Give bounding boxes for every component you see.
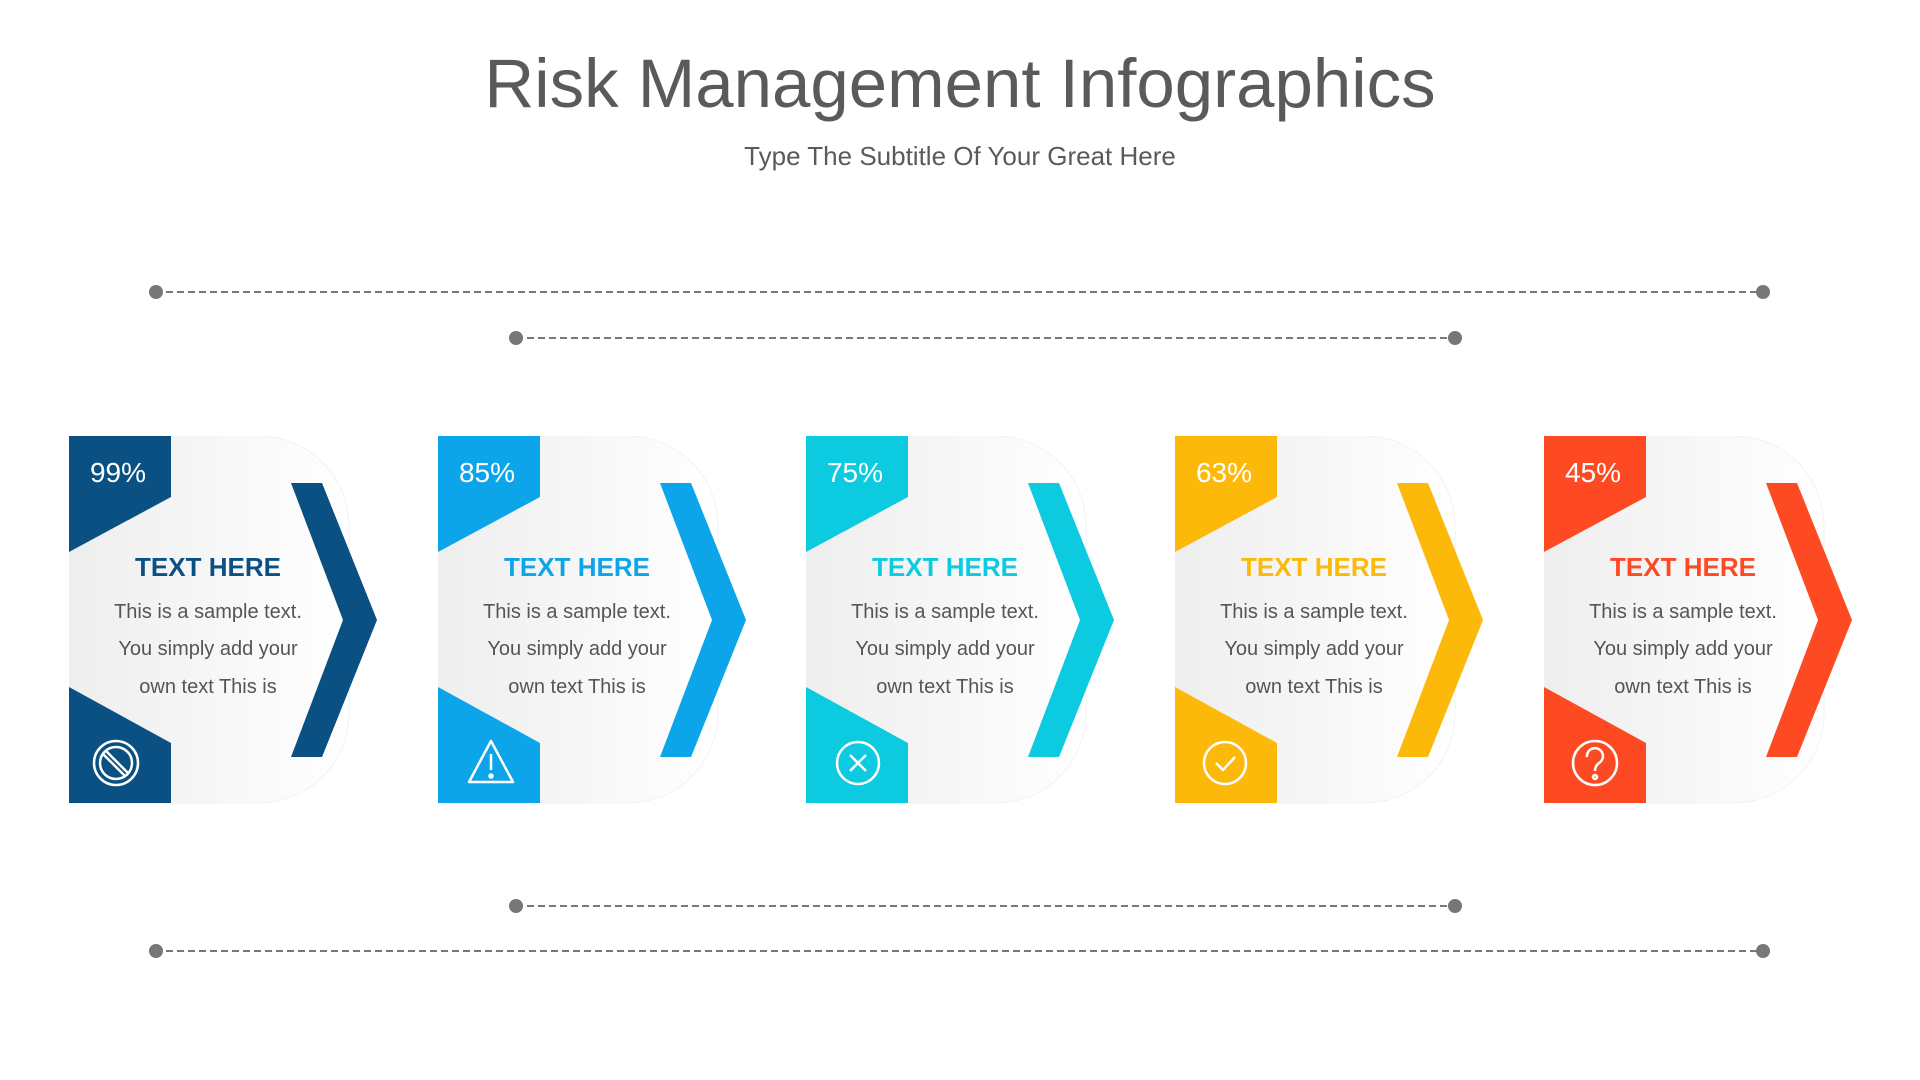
card 2: 85%: 85% (459, 457, 515, 488)
card 1: 99% (69, 436, 377, 804)
card 5: 45%: 45% (1565, 457, 1621, 488)
card 3: 75%: 75% (827, 457, 883, 488)
card 2: 85% (438, 436, 746, 804)
card 2: 85%: own text This is (508, 676, 646, 698)
card 3: 75% (806, 436, 1114, 804)
card 1: 99%: own text This is (139, 676, 277, 698)
card 2: 85%: TEXT HERE (504, 552, 650, 582)
card 3: 75%: This is a sample text. (851, 601, 1039, 623)
card 3: 75%: You simply add your (855, 638, 1035, 660)
card 5: 45%: You simply add your (1593, 638, 1773, 660)
card 2: 85%: This is a sample text. (483, 601, 671, 623)
card 3: 75%: own text This is (876, 676, 1014, 698)
card 4: 63% (1175, 436, 1483, 804)
card 4: 63%: TEXT HERE (1241, 552, 1387, 582)
card 5: 45%: This is a sample text. (1589, 601, 1777, 623)
card 1: 99%: You simply add your (118, 638, 298, 660)
card 5: 45%: TEXT HERE (1610, 552, 1756, 582)
title: Risk Management Infographics (484, 45, 1436, 122)
subtitle: Type The Subtitle Of Your Great Here (744, 141, 1176, 171)
card 4: 63%: own text This is (1245, 676, 1383, 698)
card 1: 99%: 99% (90, 457, 146, 488)
card 1: 99%: This is a sample text. (114, 601, 302, 623)
card 5: 45% (1544, 436, 1852, 804)
card 3: 75%: TEXT HERE (872, 552, 1018, 582)
card 4: 63%: You simply add your (1224, 638, 1404, 660)
card 4: 63%: 63% (1196, 457, 1252, 488)
card 2: 85%: You simply add your (487, 638, 667, 660)
card 1: 99%: TEXT HERE (135, 552, 281, 582)
card 4: 63%: This is a sample text. (1220, 601, 1408, 623)
card 5: 45%: own text This is (1614, 676, 1752, 698)
